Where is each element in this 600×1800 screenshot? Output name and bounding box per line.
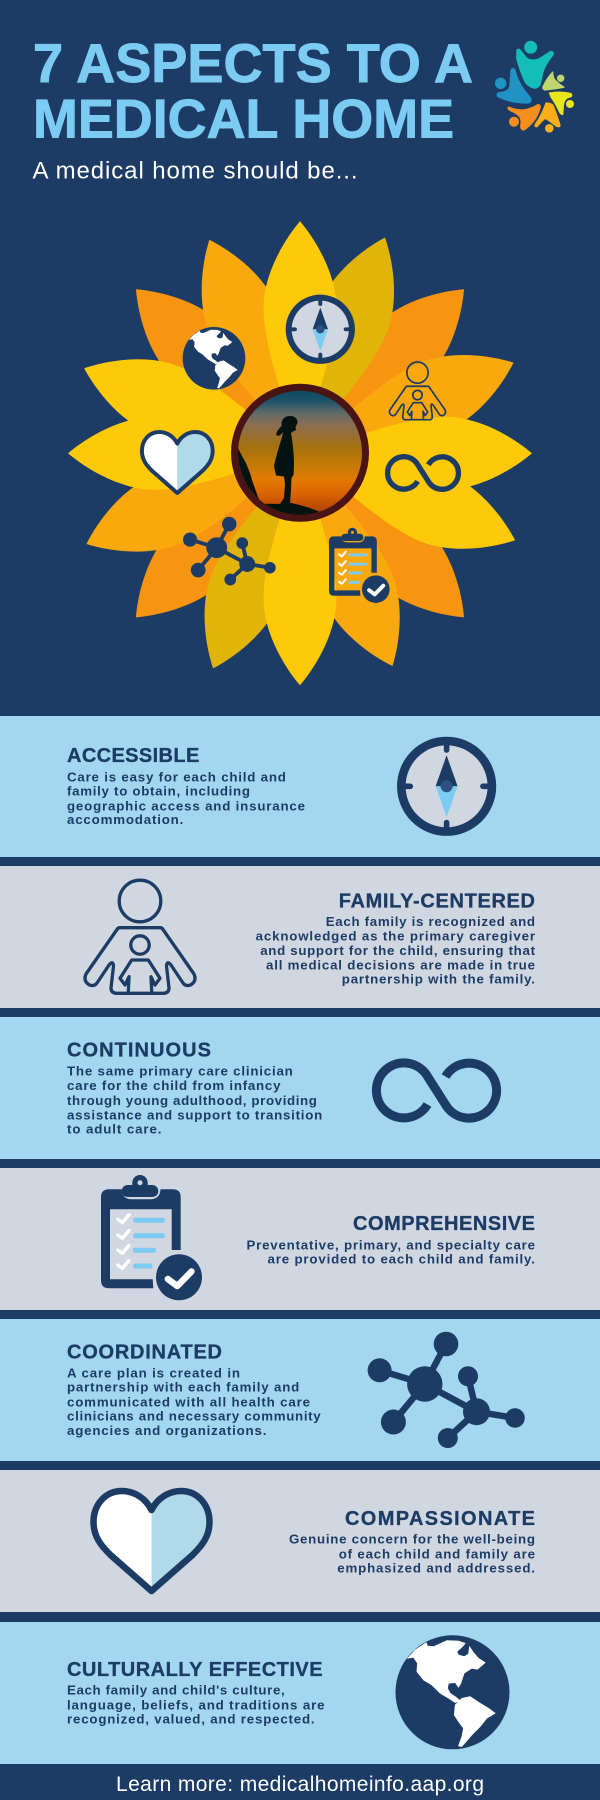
icon: compass [397,737,496,836]
heading: continuous: CONTINUOUS [67,1040,211,1062]
text: continuous: assistance and support to transition [67,1107,322,1122]
text: coordinated: A care plan is created in [67,1365,240,1380]
text: culturally effective [67,1682,324,1726]
panel: continuous [0,1017,600,1159]
panel: accessible [0,716,600,857]
icon: family [389,362,446,420]
text: compassionate: of each child and family are [339,1546,535,1561]
icon: people logo [495,41,574,133]
icon: infinity [376,1063,497,1118]
heading: comprehensive: COMPREHENSIVE [353,1213,535,1235]
title: MEDICAL HOME [33,88,454,150]
footer: learn more: Learn more: medicalhomeinfo.aap.org [116,1773,484,1796]
icon: infinity [388,457,458,489]
icon: network [368,1332,525,1448]
petals: amber [72,225,528,681]
flower graphic [68,221,532,685]
panel: coordinated [0,1319,600,1461]
panel: compassionate [0,1470,600,1612]
title [33,32,473,150]
text: coordinated: clinicians and necessary community [67,1409,321,1424]
icon: checklist clipboard [101,1175,202,1300]
text: family-centered: Each family is recognized and [326,914,535,929]
icon: globe [396,1635,510,1749]
petals: yellow [68,221,532,685]
text: family-centered: and support for the child, ensuring that [260,943,536,958]
text: compassionate: emphasized and addressed. [337,1561,535,1576]
subtitle: A medical home should be... [32,158,358,184]
text: coordinated [67,1365,321,1438]
text: accessible: family to obtain, including [67,784,250,799]
text: compassionate: Genuine concern for the well-being [289,1531,535,1546]
text: continuous: care for the child from infancy [67,1078,281,1093]
text: comprehensive: Preventative, primary, and specialty care [246,1237,535,1252]
text: comprehensive [246,1237,535,1266]
text: coordinated: agencies and organizations. [67,1423,266,1438]
text: culturally effective: Each family and child's culture, [67,1682,285,1697]
center photo: girl silhouette at sunset [231,384,369,522]
icon: heart [94,1491,210,1591]
icon: heart [142,432,213,493]
text: accessible: geographic access and insurance [67,799,305,814]
text: family-centered: all medical decisions are made in true [266,957,535,972]
heading: coordinated: COORDINATED [67,1341,222,1363]
petals: golden [179,224,419,682]
text: accessible: Care is easy for each child and [67,770,286,785]
panel: culturally effective [0,1622,600,1764]
text: continuous: through young adulthood, providing [67,1093,317,1108]
icon: compass [286,295,355,364]
text: culturally effective: language, beliefs, and traditions are [67,1697,324,1712]
panel: comprehensive [0,1168,600,1310]
heading: family-centered: FAMILY-CENTERED [339,890,535,912]
panel: family-centered [0,866,600,1008]
text: accessible: accommodation. [67,812,183,827]
text: coordinated: communicated with all health care [67,1395,310,1410]
heading: culturally effective: CULTURALLY EFFECTIVE [67,1659,323,1681]
text: family-centered: acknowledged as the primary caregiver [256,929,535,944]
text: comprehensive: are provided to each child and family. [268,1251,535,1266]
heading: accessible: ACCESSIBLE [67,745,199,767]
icon: network [183,517,276,585]
text: family-centered: partnership with the family. [342,971,535,986]
text: culturally effective: recognized, valued, and respected. [67,1711,315,1726]
title: 7 ASPECTS TO A [33,32,473,94]
text: coordinated: partnership with each family and [67,1380,299,1395]
petals: orange [110,263,490,643]
text: accessible [67,770,305,827]
heading: compassionate: COMPASSIONATE [345,1508,535,1530]
text: family-centered [256,914,536,986]
icon: checklist clipboard [329,528,390,603]
text: compassionate [289,1531,535,1576]
icon: globe [183,327,245,390]
icon: family [85,880,195,993]
text: continuous: to adult care. [67,1121,162,1136]
text: continuous: The same primary care clinician [67,1063,293,1078]
text: continuous [67,1063,322,1136]
